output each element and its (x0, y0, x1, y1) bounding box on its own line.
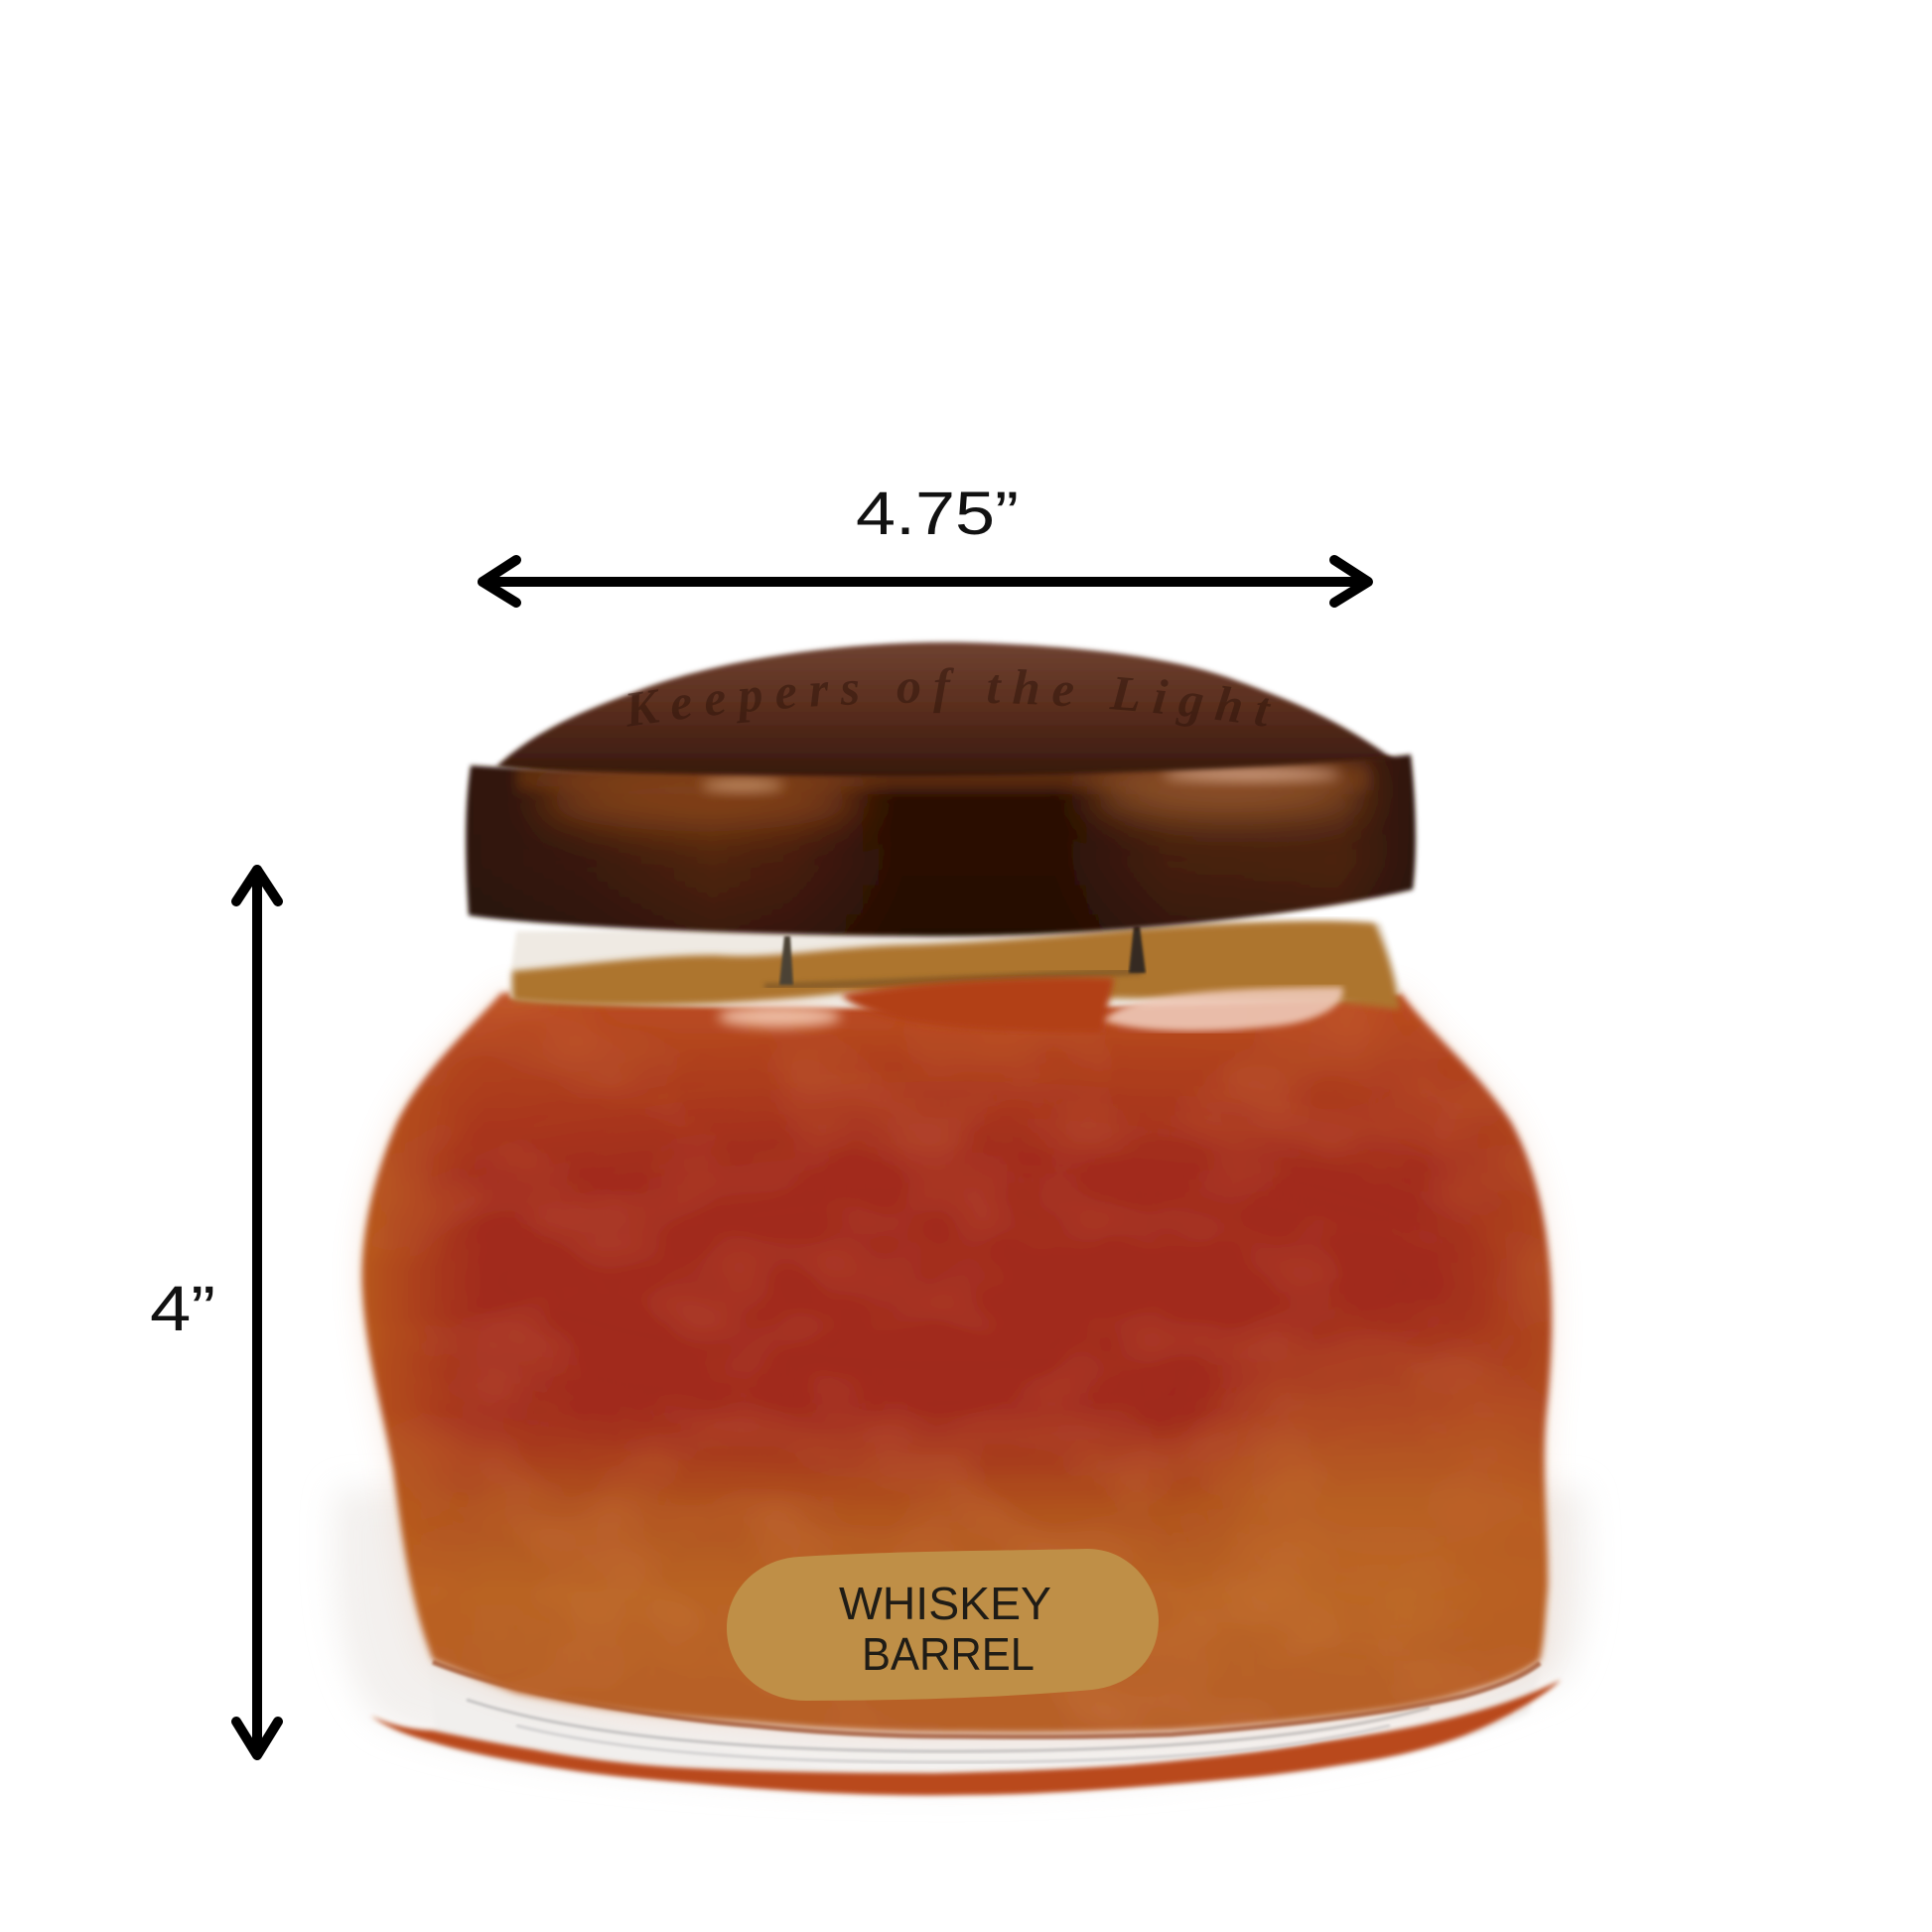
soft halo around wax (362, 993, 1552, 1732)
label pill (727, 1549, 1159, 1701)
width value: 4.75” (856, 480, 1019, 547)
double arrow: width (483, 560, 1368, 603)
height dimension (150, 870, 278, 1755)
label (727, 1549, 1159, 1701)
tan wax surface (512, 921, 1400, 1010)
width dimension (483, 480, 1368, 603)
embossed lid text: Keepers of the Light (627, 667, 1271, 727)
double arrow: height (236, 870, 278, 1755)
infographic: candle jar with dimensions (151, 492, 1588, 1800)
label text: Barrel: BARREL (862, 1628, 1035, 1680)
glass base (334, 1489, 1587, 1795)
label text: Whiskey: WHISKEY (839, 1578, 1051, 1629)
lid dome (496, 642, 1398, 785)
lid rim (466, 755, 1416, 936)
wicks (779, 926, 1146, 985)
jar (333, 602, 1588, 1800)
glass neck and top wax layer (510, 921, 1402, 1033)
lid (462, 638, 1420, 940)
wax body (338, 983, 1579, 1747)
highlights on glass (718, 1006, 841, 1028)
orange underside (370, 1680, 1561, 1795)
height value: 4” (150, 1273, 215, 1344)
